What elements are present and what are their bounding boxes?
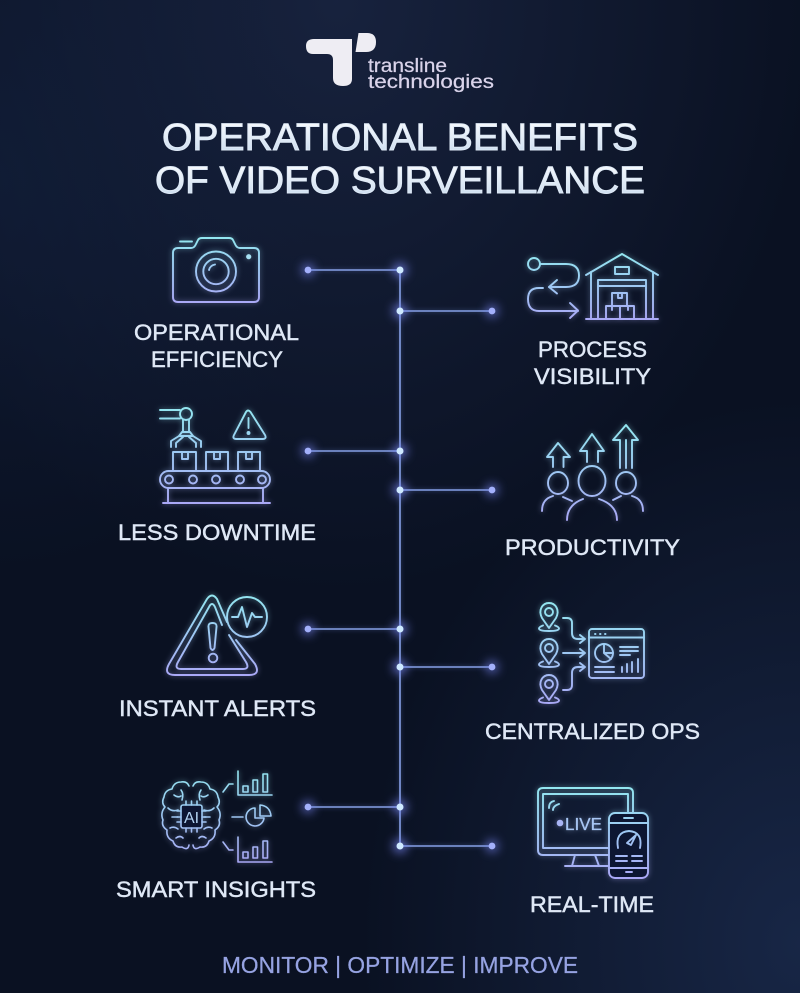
panel: centralized ops: [485, 603, 700, 744]
logo wordmark: technologies: [368, 72, 494, 93]
panel: operational efficiency: [134, 238, 299, 372]
label: VISIBILITY: [534, 364, 651, 389]
label: EFFICIENCY: [151, 347, 283, 372]
icon: AI brain with charts: AI: [184, 810, 199, 827]
panel: process visibility: [528, 254, 658, 389]
title: OPERATIONAL BENEFITS: [162, 117, 638, 159]
title: [155, 117, 645, 202]
logo: transline technologies: [306, 33, 494, 93]
label: [534, 337, 651, 389]
icon: AI brain with charts: [162, 771, 272, 862]
panel: real-time: [530, 788, 654, 917]
label: LESS DOWNTIME: [118, 520, 316, 545]
icon: team with rising arrows: [542, 425, 643, 520]
label: CENTRALIZED OPS: [485, 719, 700, 744]
panel: productivity: [505, 425, 680, 560]
connector timeline: [302, 263, 498, 853]
icon: warehouse and process flow: [528, 254, 658, 319]
panel: instant alerts: [119, 596, 316, 721]
label: OPERATIONAL: [134, 320, 299, 345]
icon: live monitor and phone gauge: LIVE: [565, 814, 602, 834]
icon: alert triangle with pulse: [167, 596, 267, 675]
label: [134, 320, 299, 372]
icon: conveyor with robot arm and warning: [160, 408, 270, 503]
icon: camera: [173, 238, 259, 302]
label: REAL-TIME: [530, 892, 654, 917]
logo mark: [306, 33, 376, 86]
title: OF VIDEO SURVEILLANCE: [155, 160, 645, 202]
logo wordmark: transline: [368, 56, 447, 77]
icon: locations to dashboard: [539, 603, 644, 703]
footer tagline: MONITOR | OPTIMIZE | IMPROVE: [222, 952, 578, 978]
panel: smart insights: [116, 771, 316, 902]
label: PROCESS: [538, 337, 647, 362]
panel: less downtime: [118, 408, 316, 545]
logo wordmark: [368, 56, 494, 93]
label: INSTANT ALERTS: [119, 696, 316, 721]
label: SMART INSIGHTS: [116, 877, 316, 902]
label: PRODUCTIVITY: [505, 535, 680, 560]
